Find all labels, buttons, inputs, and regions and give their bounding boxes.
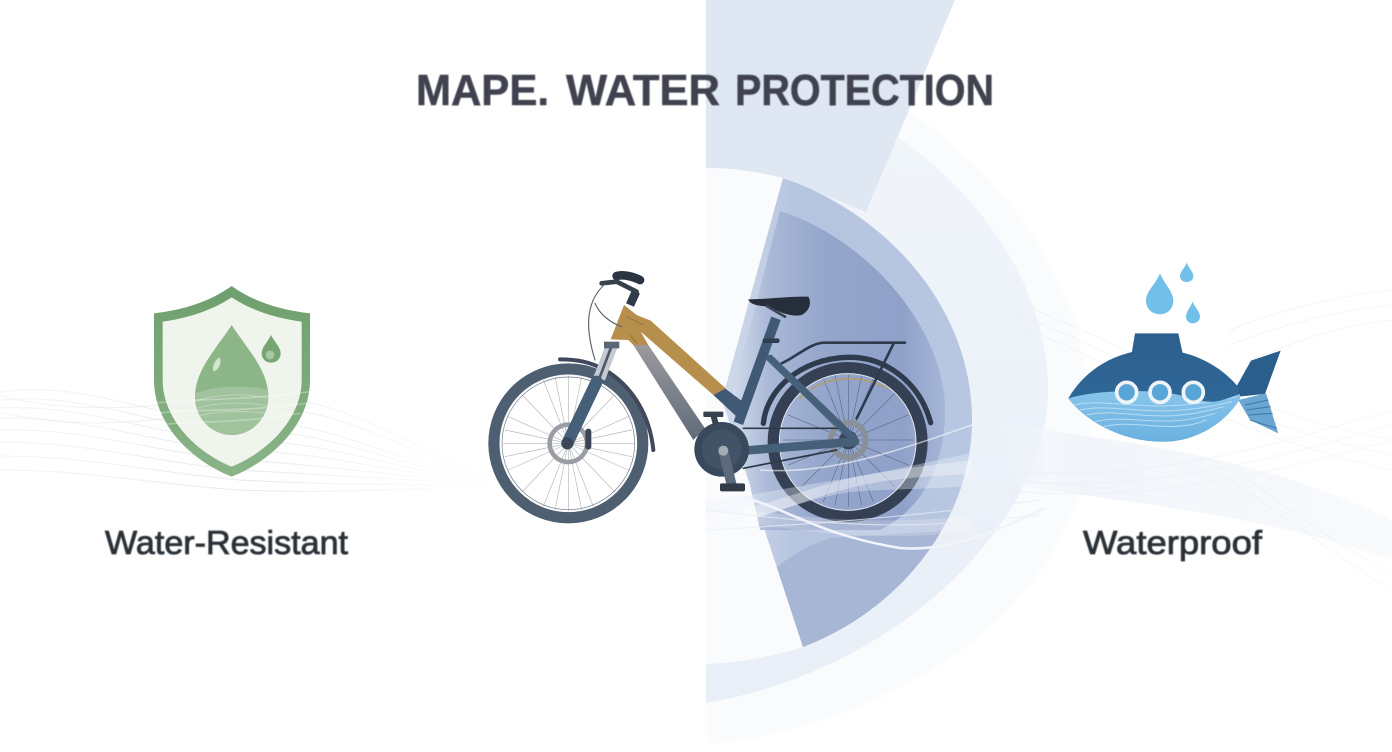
saddle: [748, 297, 810, 316]
handlebar: [617, 275, 640, 280]
title: MAPE.: [416, 66, 549, 115]
title: PROTECTION: [735, 66, 994, 115]
handlebar stem: [630, 292, 636, 305]
fish body: [1068, 349, 1240, 442]
rear wheel: [774, 368, 922, 516]
icon: green shield with water drops: [154, 286, 310, 477]
tail upper: [1236, 351, 1281, 397]
small blue drop top: [1180, 263, 1193, 282]
drop water fill: [193, 387, 270, 437]
motor: [694, 422, 749, 477]
crank arm: [723, 451, 732, 485]
water fill: [1068, 391, 1240, 442]
label: waterproof: Waterproof: [1083, 524, 1263, 561]
gold top tube and head: [611, 305, 726, 395]
portholes: [1117, 382, 1203, 402]
front fender: [560, 359, 653, 450]
waves: swoosh over rear wheel: [706, 425, 1045, 548]
icon: e-bike: [494, 275, 931, 517]
down tube: [633, 345, 705, 440]
back pedal: [713, 415, 716, 425]
shield outline: [154, 286, 310, 477]
front wheel: [494, 369, 642, 517]
seat tube: [738, 318, 776, 423]
waves: right band behind icon: [1020, 290, 1392, 590]
suspension fork: [599, 343, 613, 378]
seat stay and chain stay: [770, 358, 855, 440]
large green drop: [195, 325, 268, 435]
small green drop: [262, 335, 281, 363]
rack: [782, 343, 905, 418]
label: water-resistant: Water-Resistant: [105, 524, 348, 561]
small blue drop lower: [1186, 302, 1200, 323]
conning tower: [1132, 333, 1183, 353]
rear fender: [763, 357, 931, 423]
chain: [743, 428, 843, 468]
icon: submarine fish with water drops: [1067, 263, 1281, 443]
wave bands across shield: [154, 392, 310, 425]
lower top tube: [713, 388, 745, 417]
shield inner: [163, 297, 302, 467]
title: [416, 66, 994, 115]
waves: left band: [0, 390, 500, 491]
background panel: right side shading: [706, 0, 1048, 703]
brake cables: [589, 284, 622, 360]
title: WATER: [566, 66, 720, 115]
tail lower: [1238, 393, 1278, 433]
front pedal: [720, 483, 745, 491]
drop highlight: [213, 357, 220, 372]
large blue drop: [1146, 273, 1173, 314]
